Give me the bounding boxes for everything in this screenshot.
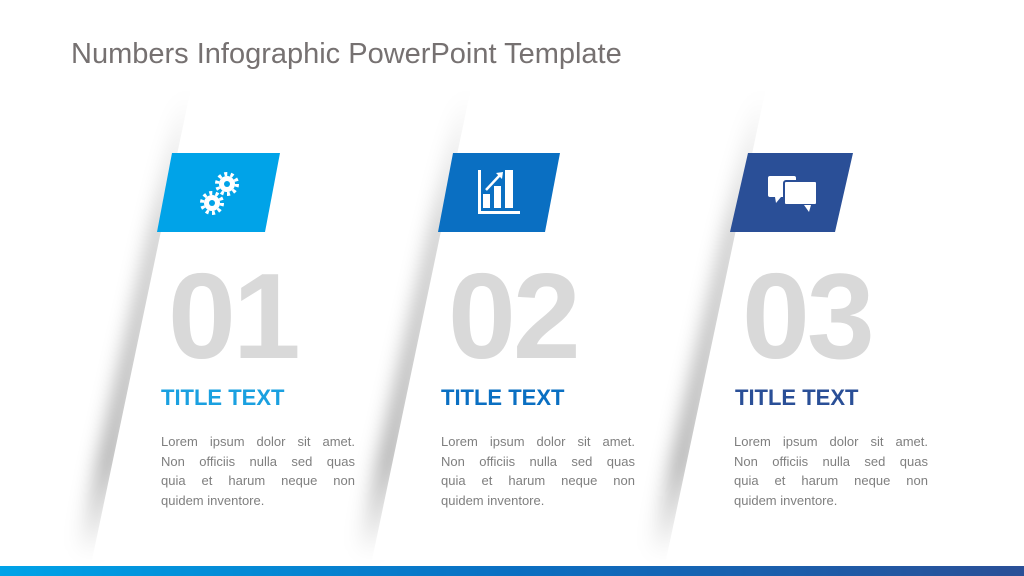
body text 3: quidem inventore. xyxy=(734,492,837,508)
title: Numbers Infographic PowerPoint Template xyxy=(71,38,622,70)
panel 1 ribbon with gear icon xyxy=(157,153,280,232)
number 01: 01 xyxy=(168,248,298,384)
body text 2 xyxy=(441,434,635,508)
body text 1: Non officiis nulla sed quas xyxy=(161,454,355,468)
body text 3: quia et harum neque non xyxy=(734,473,928,488)
body text 1: quia et harum neque non xyxy=(161,473,355,488)
title text 3: TITLE TEXT xyxy=(735,385,858,410)
number 02: 02 xyxy=(448,248,578,384)
body text 3: Non officiis nulla sed quas xyxy=(734,454,928,468)
body text 1: Lorem ipsum dolor sit amet. xyxy=(161,434,355,449)
body text 1 xyxy=(161,434,355,508)
body text 2: Non officiis nulla sed quas xyxy=(441,454,635,468)
panel 3 ribbon with chat icon xyxy=(730,153,853,232)
number 03: 03 xyxy=(742,248,872,384)
title text 1: TITLE TEXT xyxy=(161,385,284,410)
body text 3 xyxy=(734,434,928,508)
body text 2: Lorem ipsum dolor sit amet. xyxy=(441,434,635,449)
body text 2: quia et harum neque non xyxy=(441,473,635,488)
body text 1: quidem inventore. xyxy=(161,492,264,508)
bottom bar xyxy=(0,566,1024,576)
body text 3: Lorem ipsum dolor sit amet. xyxy=(734,434,928,449)
body text 2: quidem inventore. xyxy=(441,492,544,508)
panel 2 ribbon with chart icon xyxy=(438,153,560,232)
title text 2: TITLE TEXT xyxy=(441,385,564,410)
